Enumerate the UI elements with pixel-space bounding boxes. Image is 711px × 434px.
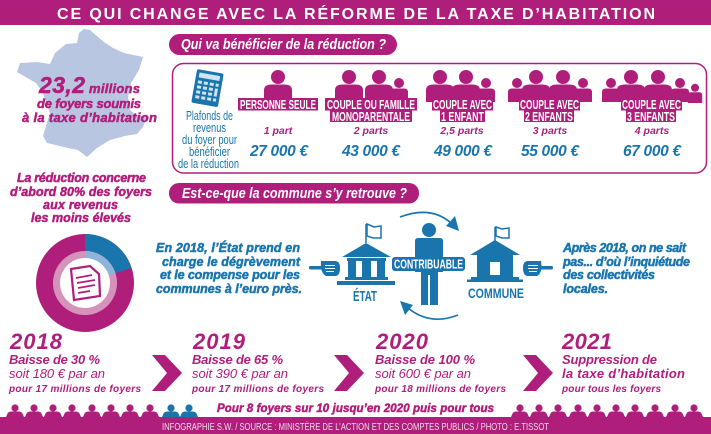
title banner xyxy=(0,0,711,25)
timeline: 2021: la taxe d’habitation xyxy=(562,366,685,381)
group: single person xyxy=(238,70,318,160)
text: after 2018 unknown: Après 2018, on ne sait xyxy=(562,241,687,255)
text: 80% of households: aux revenus xyxy=(43,198,118,212)
timeline: 2020: pour 18 millions de foyers xyxy=(374,384,506,395)
group: couple with three children: 3 ENFANTS xyxy=(627,110,675,124)
timeline: 2018: pour 17 millions de foyers xyxy=(8,384,141,395)
arrow: clockwise bottom xyxy=(400,301,458,319)
title banner: CE QUI CHANGE AVEC LA RÉFORME DE LA TAXE D’HABITATION xyxy=(57,4,655,23)
text: State compensates: communes à l’euro près. xyxy=(156,282,302,296)
text: after 2018 unknown: locales. xyxy=(563,282,608,296)
group: couple with three children: COUPLE AVEC xyxy=(622,98,681,112)
group: couple with two children: 3 parts xyxy=(533,125,567,137)
group: couple or single-parent family: 43 000 € xyxy=(341,143,401,160)
text: 80% of households: les moins élevés xyxy=(31,211,131,225)
people row: right xyxy=(511,404,703,417)
text: 80% of households xyxy=(10,171,152,225)
group: couple or single-parent family xyxy=(325,70,417,160)
text: income ceiling caption: bénéficier xyxy=(189,144,230,159)
group: couple or single-parent family: COUPLE OU FAMILLE xyxy=(327,98,415,112)
timeline: 2021: pour tous les foyers xyxy=(561,384,661,395)
text: 80% of households: La réduction concerne xyxy=(17,171,146,185)
text: income ceiling caption: de la réduction xyxy=(178,156,239,171)
timeline: 2018: soit 180 € par an xyxy=(9,366,105,381)
text: income ceiling caption: revenus xyxy=(193,120,226,135)
group: couple with one child: COUPLE AVEC xyxy=(433,98,492,112)
text: 8 households out of 10: Pour 8 foyers sur 10 jusqu’en 2020 puis pour tous xyxy=(217,403,494,415)
text: after 2018 unknown: pas... d’où l’inquiétude xyxy=(562,255,690,269)
arrow: clockwise top xyxy=(400,212,459,231)
arrow: 2019 to 2020 xyxy=(334,355,364,391)
group: single person: 27 000 € xyxy=(249,143,309,160)
timeline: 2021: Suppression de xyxy=(562,352,657,367)
label: Commune: COMMUNE xyxy=(468,285,524,301)
text: income ceiling caption xyxy=(178,108,239,171)
timeline: 2018: Baisse de 30 % xyxy=(9,352,100,367)
map of France with household count: millions xyxy=(89,81,140,96)
timeline: 2020: 2020 xyxy=(375,329,429,354)
icon: taxpayer figure xyxy=(392,223,465,305)
group: couple with three children: 4 parts xyxy=(634,125,669,137)
group: couple with three children xyxy=(602,70,702,160)
timeline: 2021: 2021 xyxy=(561,329,612,354)
group: couple with three children: 67 000 € xyxy=(623,143,682,160)
text: after 2018 unknown xyxy=(562,241,690,296)
icon: document xyxy=(71,266,100,300)
group: couple with two children: COUPLE AVEC xyxy=(520,98,579,112)
people row: left xyxy=(6,404,198,417)
timeline: 2020: soit 600 € par an xyxy=(375,366,471,381)
map of France with household count xyxy=(17,29,157,157)
text: income ceiling caption: Plafonds de xyxy=(186,108,233,123)
donut chart: 80% share xyxy=(36,234,134,332)
map of France with household count: 23,2 xyxy=(38,72,85,98)
text: after 2018 unknown: des collectivités xyxy=(563,268,655,282)
text: income ceiling caption: du foyer pour xyxy=(182,132,237,147)
arrow: 2020 to 2021 xyxy=(523,355,553,391)
text: 80% of households: d’abord 80% des foyers xyxy=(10,185,152,199)
icon: pointing hand right xyxy=(523,261,553,276)
icon: calculator xyxy=(191,69,224,107)
timeline: 2020: Baisse de 100 % xyxy=(375,352,475,367)
timeline: 2019 xyxy=(191,329,324,395)
map of France with household count: à la taxe d’habitation xyxy=(22,110,157,125)
map of France with household count: de foyers soumis xyxy=(37,96,141,111)
group: couple with two children xyxy=(508,70,592,160)
icon: taxpayer figure: CONTRIBUABLE xyxy=(394,256,463,272)
label: État: ÉTAT xyxy=(353,288,377,305)
heading: the municipality xyxy=(169,183,419,204)
timeline: 2018: 2018 xyxy=(9,329,63,354)
timeline: 2019: 2019 xyxy=(192,329,246,354)
group: single person: 1 part xyxy=(264,125,293,137)
timeline: 2018 xyxy=(8,329,141,395)
heading: who benefits xyxy=(169,34,397,55)
text: State compensates: et le compense pour les xyxy=(160,268,300,282)
timeline: 2019: soit 390 € par an xyxy=(192,366,288,381)
footer credits xyxy=(0,417,711,434)
group: couple with one child: 2,5 parts xyxy=(439,125,484,137)
group: couple with one child: 1 ENFANT xyxy=(441,110,484,124)
heading: who benefits: Qui va bénéficier de la réduction ? xyxy=(181,37,386,53)
arrow: 2018 to 2019 xyxy=(152,355,182,391)
group: couple with two children: 55 000 € xyxy=(521,143,580,160)
text: State compensates: charge le dégrèvement xyxy=(162,255,301,269)
icon: State building xyxy=(337,224,395,285)
group: couple with one child: 49 000 € xyxy=(433,143,493,160)
heading: the municipality: Est-ce-que la commune s’y retrouve ? xyxy=(182,186,407,202)
panel: income ceilings xyxy=(172,64,706,173)
icon: municipality building xyxy=(467,227,523,282)
timeline: 2019: pour 17 millions de foyers xyxy=(191,384,324,395)
timeline: 2021 xyxy=(561,329,685,395)
group: couple with two children: 2 ENFANTS xyxy=(525,110,573,124)
timeline: 2019: Baisse de 65 % xyxy=(192,352,283,367)
group: single person: PERSONNE SEULE xyxy=(240,98,316,112)
group: couple or single-parent family: MONOPARENTALE xyxy=(332,110,410,124)
icon: pointing hand left xyxy=(309,261,340,276)
group: couple or single-parent family: 2 parts xyxy=(353,125,388,137)
footer credits: INFOGRAPHIE S.W. / SOURCE : MINISTÈRE DE L’ACTION ET DES COMPTES PUBLICS / PHOTO : E.TISSOT xyxy=(162,420,549,433)
timeline: 2020 xyxy=(374,329,506,395)
text: State compensates xyxy=(156,240,302,296)
group: couple with one child xyxy=(426,70,495,160)
text: State compensates: En 2018, l’État prend en xyxy=(156,240,300,255)
